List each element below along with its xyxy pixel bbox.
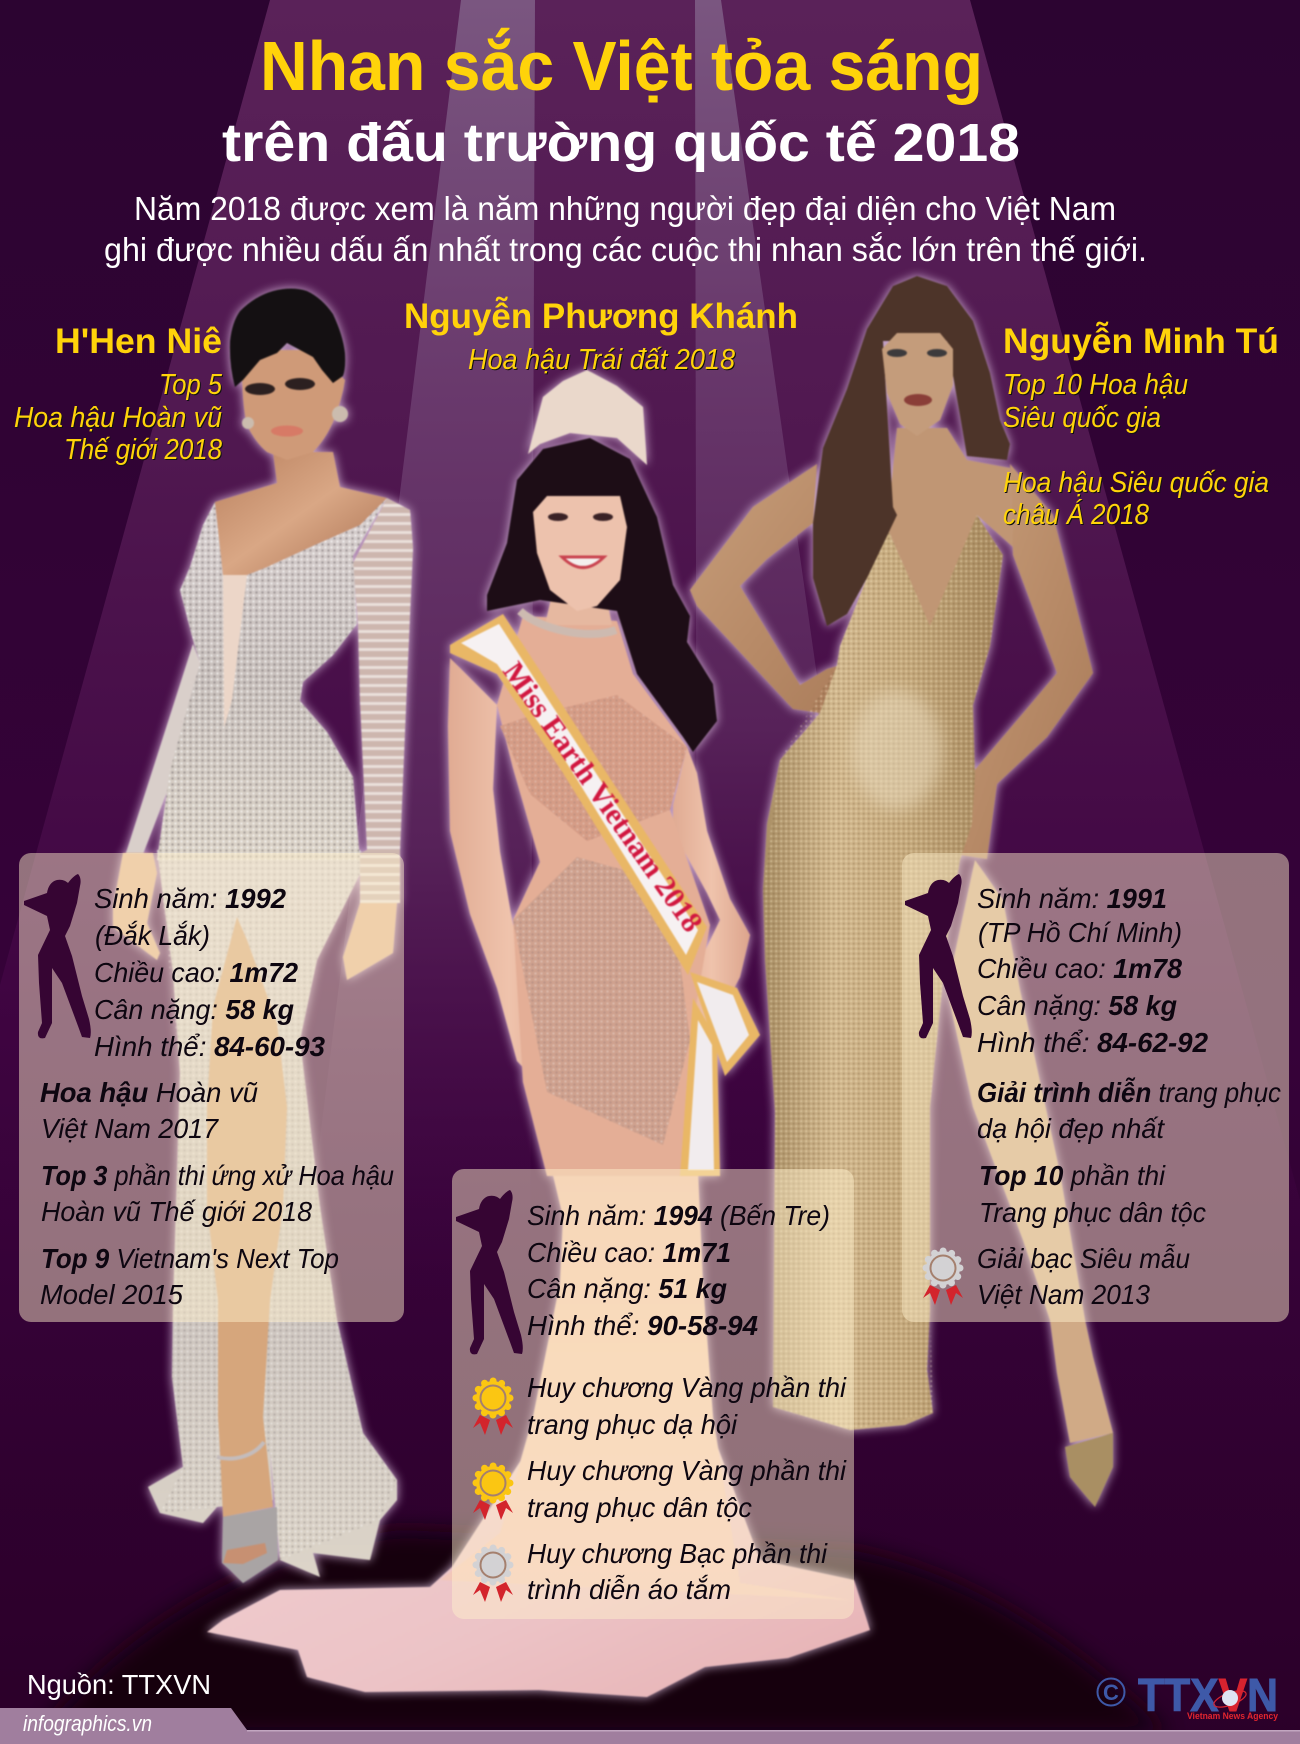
heading: Nguyễn Minh Tú: Siêu quốc gia [1003,402,1161,434]
title: Nhan sắc Việt tỏa sáng [260,27,983,105]
icon: silver medal [923,1251,963,1305]
heading: H'Hen Niê: Thế giới 2018 [64,434,222,466]
face [533,496,627,611]
text: achievements: Model 2015 [40,1279,183,1310]
text: achievements: Trang phục dân tộc [979,1197,1206,1228]
logo: TTXVN: TTXVN [1138,1669,1278,1721]
subtitle: trên đấu trường quốc tế 2018 [222,113,1020,173]
left arm [690,464,880,713]
text: achievements: Hoa hậu Hoàn vũ [40,1077,258,1108]
text: gold medal national costume [527,1455,847,1523]
text: personal details: Sinh năm: 1994 (Bến Tre) [527,1200,830,1231]
text: personal details: Chiều cao: 1m71 [527,1237,731,1268]
text: personal details: Sinh năm: 1992 [94,883,286,914]
hip beadwork [513,857,690,1145]
icon: gold medal [473,1381,513,1435]
eyes and smile [548,513,613,568]
text: achievements: Hoàn vũ Thế giới 2018 [41,1196,312,1227]
text: gold medal evening gown: trang phục dạ hội [527,1409,738,1440]
sash tails [680,972,760,1176]
left hand [113,853,160,960]
right arm [953,464,1093,859]
text: personal details: Hình thể: 84-60-93 [94,1031,325,1062]
text: silver medal swimsuit: Huy chương Bạc phần thi [527,1538,828,1569]
face [242,350,345,460]
intro text: Năm 2018 được xem là năm những người đẹp đại diện cho Việt Nam [134,190,1116,227]
text: silver supermodel award [977,1243,1190,1310]
train [207,1400,870,1697]
left arm [448,658,570,1082]
text: personal details [94,883,325,1062]
neckline panel [223,575,247,728]
logo: TTXVN: Vietnam News Agency [1187,1711,1278,1721]
right hand [343,903,397,980]
text: personal details [977,883,1208,1058]
stage floor shadow [40,1530,1170,1735]
logo: TTXVN: C [1103,1680,1119,1705]
text: gold medal national costume: trang phục dân tộc [527,1492,752,1523]
chest [215,452,387,575]
ankle strap [217,1442,264,1459]
text: achievements [40,1077,394,1310]
heading: Nguyễn Phương Khánh: Hoa hậu Trái đất 2018 [468,344,735,376]
intro text [104,190,1147,268]
heading: H'Hen Niê: Hoa hậu Hoàn vũ [14,402,222,434]
heading: Nguyễn Phương Khánh [404,296,798,376]
chest beadwork [500,695,687,841]
figure: Nguyễn Phương Khánh [207,370,870,1697]
text: achievements: Top 10 phần thi [979,1160,1166,1191]
heading: Nguyễn Minh Tú [1003,321,1279,531]
torso dress [157,498,387,860]
eyes and lips [887,349,947,406]
eyes and lips [245,378,315,436]
heading: H'Hen Niê: H'Hen Niê [55,322,222,361]
text: personal details: Hình thể: 84-62-92 [977,1027,1208,1058]
necklace [520,611,616,634]
text: personal details: (Đắk Lắk) [95,920,210,951]
text: personal details: Cân nặng: 58 kg [94,994,294,1025]
icon: silhouette [24,874,91,1038]
right sleeve [353,498,413,903]
text: personal details: Chiều cao: 1m72 [94,957,298,988]
website: infographics.vn [23,1711,152,1736]
sandal [222,1507,278,1583]
toes [223,1543,267,1564]
panel: Nguyễn Phương Khánh stats [452,1169,854,1619]
text: achievements: Giải trình diễn trang phục [977,1077,1281,1108]
text: achievements: Top 9 Vietnam's Next Top [41,1243,339,1274]
icon: silhouette [456,1190,523,1354]
text: silver medal swimsuit [527,1538,828,1605]
heading: Nguyễn Minh Tú: Hoa hậu Siêu quốc gia [1003,467,1269,499]
text: personal details: Cân nặng: 51 kg [527,1273,727,1304]
highlight [852,690,942,810]
text: personal details: Hình thể: 90-58-94 [527,1310,758,1341]
sash text: Miss Earth Vietnam 2018 [496,656,709,938]
skirt sequins [157,850,397,1560]
heading: Nguyễn Minh Tú: châu Á 2018 [1003,498,1149,531]
neck [545,590,612,625]
leg [947,860,1113,1443]
hair [813,276,1010,626]
hair [230,288,345,387]
footer bar [0,1708,1300,1744]
icon: silver medal [473,1548,513,1602]
panel: H'Hen Niê stats [19,853,404,1322]
source: Nguồn: TTXVN [27,1669,211,1700]
heading: H'Hen Niê [14,322,223,466]
sash [450,614,707,975]
text: personal details: Sinh năm: 1991 [977,883,1167,914]
text: achievements [977,1077,1281,1228]
heading: Nguyễn Minh Tú: Top 10 Hoa hậu [1003,369,1188,401]
text: gold medal evening gown: Huy chương Vàng phần thi [527,1372,847,1403]
crown [528,370,647,465]
text: silver medal swimsuit: trình diễn áo tắm [527,1574,731,1605]
gown [763,515,1003,1430]
text: personal details: Cân nặng: 58 kg [977,990,1177,1021]
icon: gold medal [473,1466,513,1520]
figure: H'Hen Niê [113,288,413,1583]
skirt [148,850,397,1577]
text: achievements: Việt Nam 2017 [41,1113,219,1144]
shoe [1065,1433,1113,1507]
text: personal details: Chiều cao: 1m78 [977,953,1182,984]
text: personal details: (TP Hồ Chí Minh) [978,917,1182,948]
heading: Nguyễn Phương Khánh: Nguyễn Phương Khánh [404,296,798,336]
dress torso [497,616,710,1176]
lower gown [440,1150,850,1600]
intro text: ghi được nhiều dấu ấn nhất trong các cuộc thi nhan sắc lớn trên thế giới. [104,231,1147,268]
text: personal details [527,1200,830,1341]
right arm [673,747,750,1040]
chest [887,428,1013,626]
earrings [242,406,348,429]
leg [207,917,287,1517]
left sleeve [123,644,200,860]
heading: H'Hen Niê: Top 5 [159,369,223,401]
text: silver supermodel award: Giải bạc Siêu mẫu [977,1243,1190,1274]
text: achievements: dạ hội đẹp nhất [977,1113,1165,1144]
hair [487,438,717,752]
text: achievements: Top 3 phần thi ứng xử Hoa hậu [41,1160,394,1191]
text: gold medal evening gown [527,1372,847,1440]
figure: Nguyễn Minh Tú [690,276,1113,1507]
heading: Nguyễn Minh Tú: Nguyễn Minh Tú [1003,321,1279,361]
text: silver supermodel award: Việt Nam 2013 [977,1279,1150,1310]
panel: Nguyễn Minh Tú stats [902,853,1289,1322]
face [882,333,953,436]
text: gold medal national costume: Huy chương Vàng phần thi [527,1455,847,1486]
icon: silhouette [905,874,972,1038]
